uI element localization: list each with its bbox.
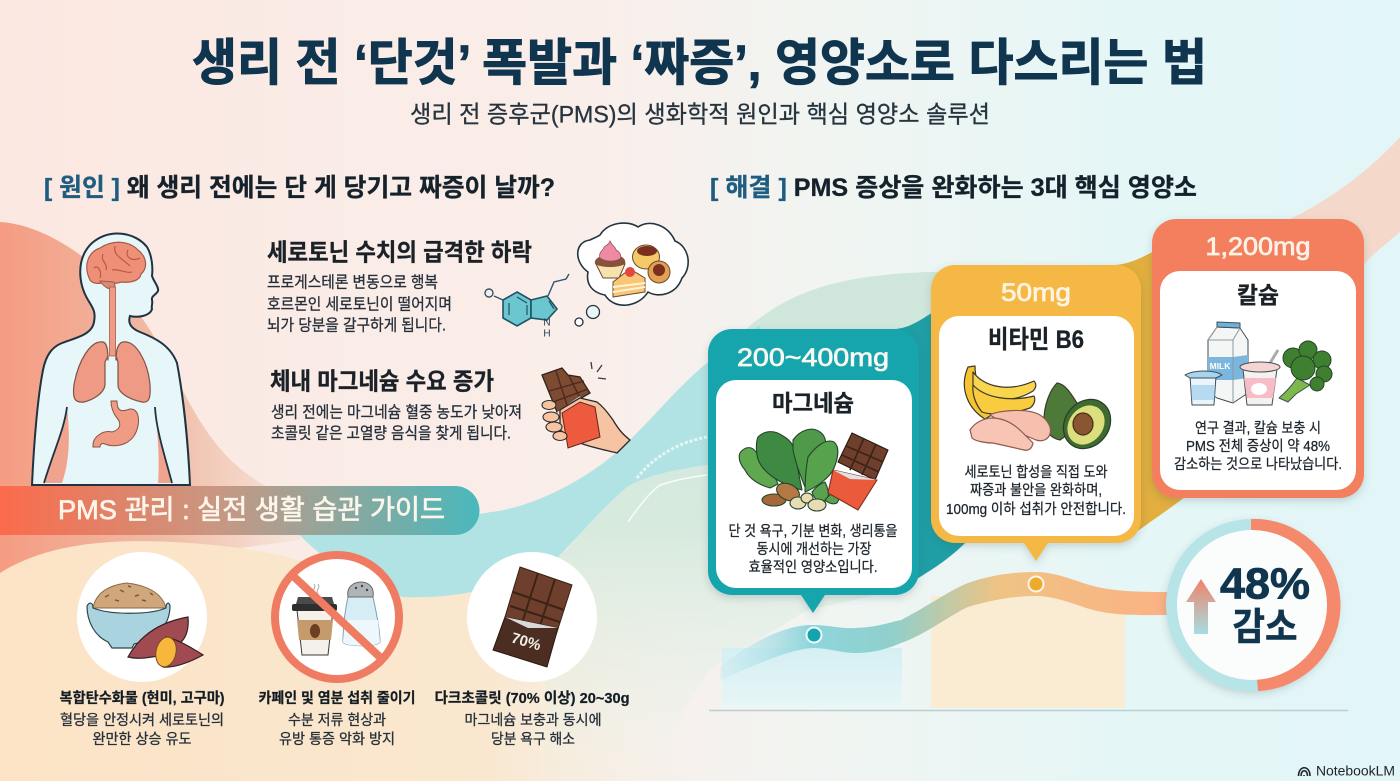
organ: lungs: [73, 342, 150, 402]
text: serotonin drop: 프로게스테론 변동으로 행복: [267, 274, 438, 292]
marker: vitamin B6 dot: [1028, 576, 1044, 592]
text: magnesium demand: [270, 368, 522, 442]
text: magnesium demand: 체내 마그네슘 수요 증가: [270, 368, 494, 396]
connectors between cards: [895, 250, 1185, 580]
tip 2: reduce caffeine and salt: 카페인 및 염분 섭취 줄이기: [258, 690, 416, 707]
icon: serotonin molecule: [485, 274, 569, 340]
card: vitamin B6: 세로토닌 합성을 직접 도와: [964, 464, 1108, 481]
chart: ascending bars and ribbon: [709, 572, 1348, 710]
panel: PMS guide banner: PMS 관리 : 실전 생활 습관 가이드: [58, 495, 445, 525]
card: magnesium: 200~400mg: [737, 344, 889, 372]
text: serotonin drop: 뇌가 당분을 갈구하게 됩니다.: [267, 316, 446, 334]
heading: cause section: [ 원인 ] 왜 생리 전에는 단 게 당기고 짜증이 날까?: [44, 174, 555, 202]
illustration: human body: [32, 234, 190, 485]
icon: milk, yogurt and broccoli: MILK: [1210, 361, 1231, 371]
gauge: 48% decrease: 48%: [1220, 560, 1310, 608]
card: vitamin B6: 100mg 이하 섭취가 안전합니다.: [946, 501, 1126, 518]
card: vitamin B6: 50mg: [1001, 279, 1071, 307]
tip 1: complex carbs: [60, 552, 225, 748]
icon: arrow: [1186, 579, 1216, 634]
icon: salt shaker: [343, 582, 380, 646]
tip 3: dark chocolate: 다크초콜릿 (70% 이상) 20~30g: [434, 690, 630, 707]
tip 2: reduce caffeine and salt: 수분 저류 현상과: [288, 712, 386, 729]
organ: spine and airway: [110, 287, 116, 356]
tip 1: complex carbs: 혈당을 안정시켜 세로토닌의: [60, 712, 224, 729]
tip 3: dark chocolate: 당분 욕구 해소: [491, 731, 575, 748]
gauge: 48% decrease: 감소: [1232, 607, 1298, 649]
logo: NotebookLM: NotebookLM: [1316, 764, 1395, 778]
dessert: donut: [632, 245, 660, 269]
icon: dark chocolate bar 70%: [493, 567, 572, 667]
card: vitamin B6: 비타민 B6: [988, 326, 1084, 354]
card: calcium: 1,200mg: [1206, 233, 1310, 261]
icon: serotonin molecule: H: [543, 328, 551, 340]
card: magnesium: 동시에 개선하는 가장: [756, 541, 872, 558]
text: serotonin drop: 호르몬인 세로토닌이 떨어지며: [267, 296, 452, 314]
panel: PMS guide banner: [0, 486, 480, 535]
icon: dark chocolate bar 70%: 70%: [509, 630, 543, 654]
icon: brown rice bowl: [87, 583, 203, 669]
dessert: cupcake: [595, 241, 625, 278]
tip 2: reduce caffeine and salt: 유방 통증 악화 방지: [279, 731, 395, 748]
card: calcium: [1152, 219, 1364, 498]
tip 3: dark chocolate: 마그네슘 보충과 동시에: [464, 712, 602, 729]
subtitle: 생리 전 증후군(PMS)의 생화학적 원인과 핵심 영양소 솔루션: [410, 102, 990, 128]
heading: solution section: [ 해결 ] PMS 증상을 완화하는 3대 핵심 영양소: [710, 174, 1197, 202]
marker: magnesium dot: [806, 628, 822, 642]
card: calcium: 감소하는 것으로 나타났습니다.: [1174, 456, 1342, 473]
icon: hand holding chocolate: [542, 362, 630, 453]
gauge: 48% decrease: [1166, 519, 1341, 691]
text: serotonin drop: 세로토닌 수치의 급격한 하락: [267, 240, 532, 266]
icon: banana, chicken and avocado: [964, 366, 1120, 458]
card: magnesium: 단 것 욕구, 기분 변화, 생리통을: [728, 523, 898, 540]
icon: spinach, nuts and chocolate: [739, 429, 888, 511]
card: vitamin B6: 짜증과 불안을 완화하며,: [970, 482, 1102, 499]
tip 3: dark chocolate: [434, 552, 630, 748]
card: magnesium: [708, 329, 919, 613]
icon: serotonin molecule: N: [543, 318, 551, 328]
tip 2: reduce caffeine and salt: [258, 552, 416, 748]
icon: coffee cup: [292, 584, 337, 655]
icon: sweet potato: [128, 617, 203, 669]
card: calcium: 칼슘: [1237, 282, 1279, 308]
text: magnesium demand: 생리 전에는 마그네슘 혈중 농도가 낮아져: [271, 404, 522, 422]
card: magnesium: 마그네슘: [772, 390, 854, 416]
tip 1: complex carbs: 완만한 상승 유도: [92, 731, 192, 748]
tip 1: complex carbs: 복합탄수화물 (현미, 고구마): [60, 690, 225, 707]
text: magnesium demand: 초콜릿 같은 고열량 음식을 찾게 됩니다.: [271, 424, 511, 442]
icon: milk, yogurt and broccoli: [1185, 322, 1332, 405]
card: magnesium: 효율적인 영양소입니다.: [748, 559, 878, 576]
organ: stomach: [93, 401, 139, 447]
card: calcium: 연구 결과, 칼슘 보충 시: [1195, 420, 1321, 437]
card: vitamin B6: [931, 265, 1141, 561]
organ: brain: [87, 242, 146, 289]
dessert: cake slice: [613, 269, 645, 297]
card: calcium: PMS 전체 증상이 약 48%: [1186, 438, 1330, 455]
icon: prohibition sign: [275, 555, 399, 679]
icon: thought bubble with desserts: [575, 223, 688, 326]
title: 생리 전 ‘단것’ 폭발과 ‘짜증’, 영양소로 다스리는 법: [192, 35, 1207, 91]
text: serotonin drop: [267, 240, 532, 334]
